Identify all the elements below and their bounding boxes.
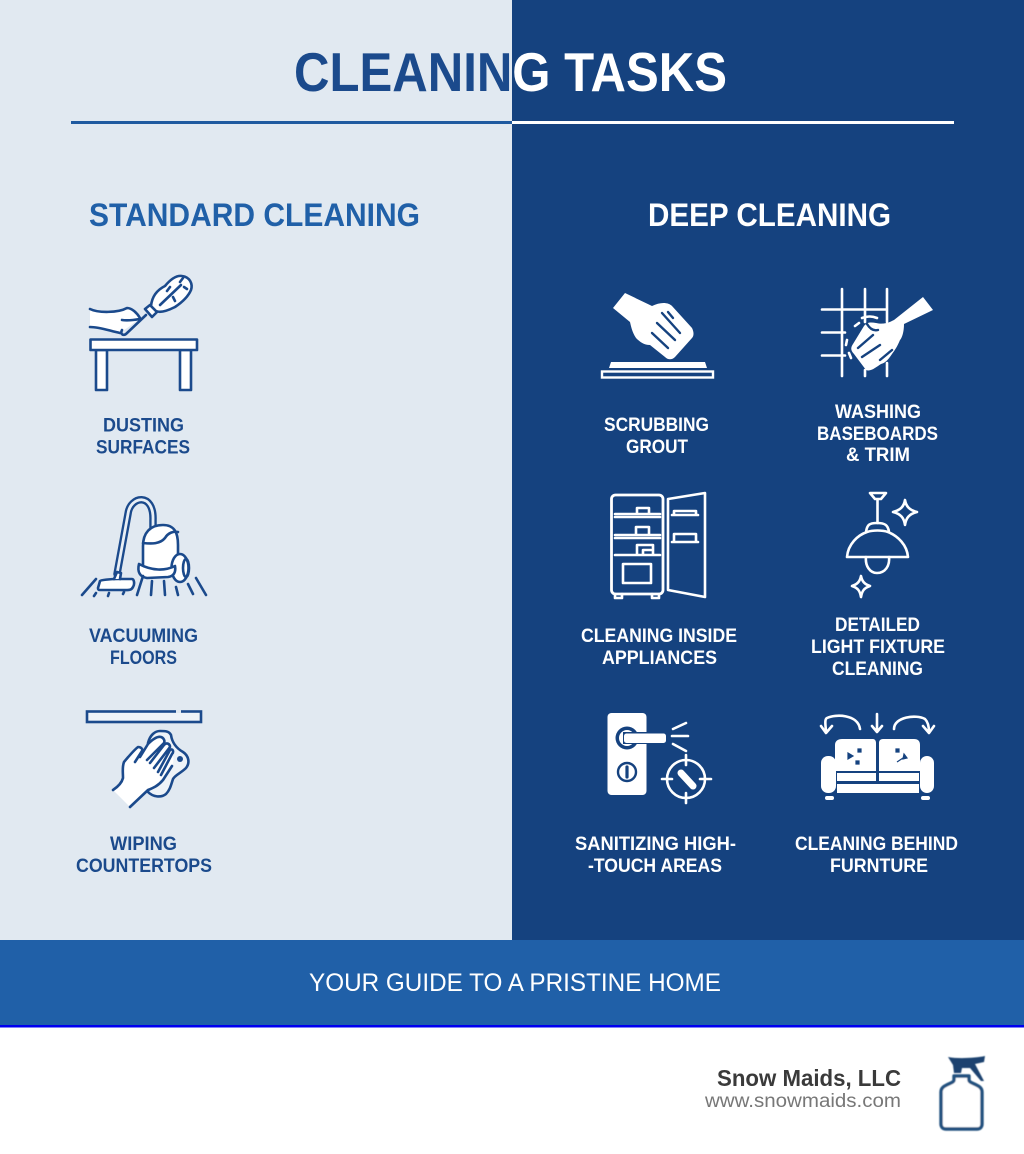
icon: sanitizing high-touch areas <box>608 713 711 803</box>
label: washing baseboards and trim: WASHING <box>835 402 921 423</box>
icon: vacuuming floors <box>82 500 206 596</box>
label: sanitizing high-touch areas: SANITIZING HIGH- <box>575 834 736 855</box>
banner: tagline: YOUR GUIDE TO A PRISTINE HOME <box>309 969 721 997</box>
icon: detailed light fixture cleaning <box>847 493 917 597</box>
heading: standard cleaning: STANDARD CLEANING <box>89 197 420 233</box>
label: wiping countertops <box>76 834 212 877</box>
label: washing baseboards and trim: BASEBOARDS <box>817 424 938 445</box>
icon: cleaning inside appliances <box>612 493 705 598</box>
label: cleaning behind furniture: CLEANING BEHIND <box>795 834 958 855</box>
label: vacuuming floors <box>89 626 198 669</box>
company name and website: www.snowmaids.com <box>704 1091 901 1112</box>
icon: wiping countertops <box>87 708 201 807</box>
label: detailed light fixture cleaning: LIGHT FIXTURE <box>811 637 945 658</box>
label: sanitizing high-touch areas: -TOUCH AREAS <box>588 856 722 877</box>
panel: deep cleaning <box>575 197 958 877</box>
label: sanitizing high-touch areas <box>575 834 736 877</box>
label: vacuuming floors: VACUUMING <box>89 626 198 647</box>
label: cleaning inside appliances: APPLIANCES <box>602 648 717 669</box>
label: wiping countertops: COUNTERTOPS <box>76 856 212 877</box>
label: dusting surfaces: SURFACES <box>96 438 190 458</box>
heading: deep cleaning: DEEP CLEANING <box>648 197 891 233</box>
label: detailed light fixture cleaning: CLEANING <box>832 659 923 680</box>
title: CLEANING TASKS <box>294 41 727 103</box>
label: washing baseboards and trim: & TRIM <box>846 445 910 466</box>
label: washing baseboards and trim <box>817 402 938 466</box>
label: cleaning behind furniture <box>795 834 958 877</box>
title: CLEANING TASKS <box>294 41 727 103</box>
label: vacuuming floors: FLOORS <box>110 648 177 669</box>
label: cleaning inside appliances: CLEANING INSIDE <box>581 626 737 647</box>
company name and website <box>704 1065 901 1112</box>
label: dusting surfaces <box>96 416 190 458</box>
label: cleaning inside appliances <box>581 626 737 669</box>
title rule <box>71 121 954 124</box>
label: dusting surfaces: DUSTING <box>103 416 184 436</box>
icon: washing baseboards and trim <box>822 289 933 376</box>
icon: dusting surfaces <box>90 276 197 390</box>
icon: spray bottle logo <box>941 1056 985 1129</box>
label: scrubbing grout <box>604 415 709 458</box>
company name and website: Snow Maids, LLC <box>717 1065 901 1091</box>
banner: tagline <box>0 940 1024 1028</box>
label: detailed light fixture cleaning <box>811 615 945 680</box>
label: detailed light fixture cleaning: DETAILED <box>835 615 920 636</box>
label: scrubbing grout: GROUT <box>626 437 688 458</box>
label: scrubbing grout: SCRUBBING <box>604 415 709 436</box>
label: wiping countertops: WIPING <box>110 834 177 855</box>
panel: standard cleaning <box>76 197 420 877</box>
icon: cleaning behind furniture <box>821 714 934 800</box>
label: cleaning behind furniture: FURNTURE <box>830 856 928 877</box>
title <box>296 52 726 92</box>
icon: scrubbing grout <box>602 293 713 378</box>
